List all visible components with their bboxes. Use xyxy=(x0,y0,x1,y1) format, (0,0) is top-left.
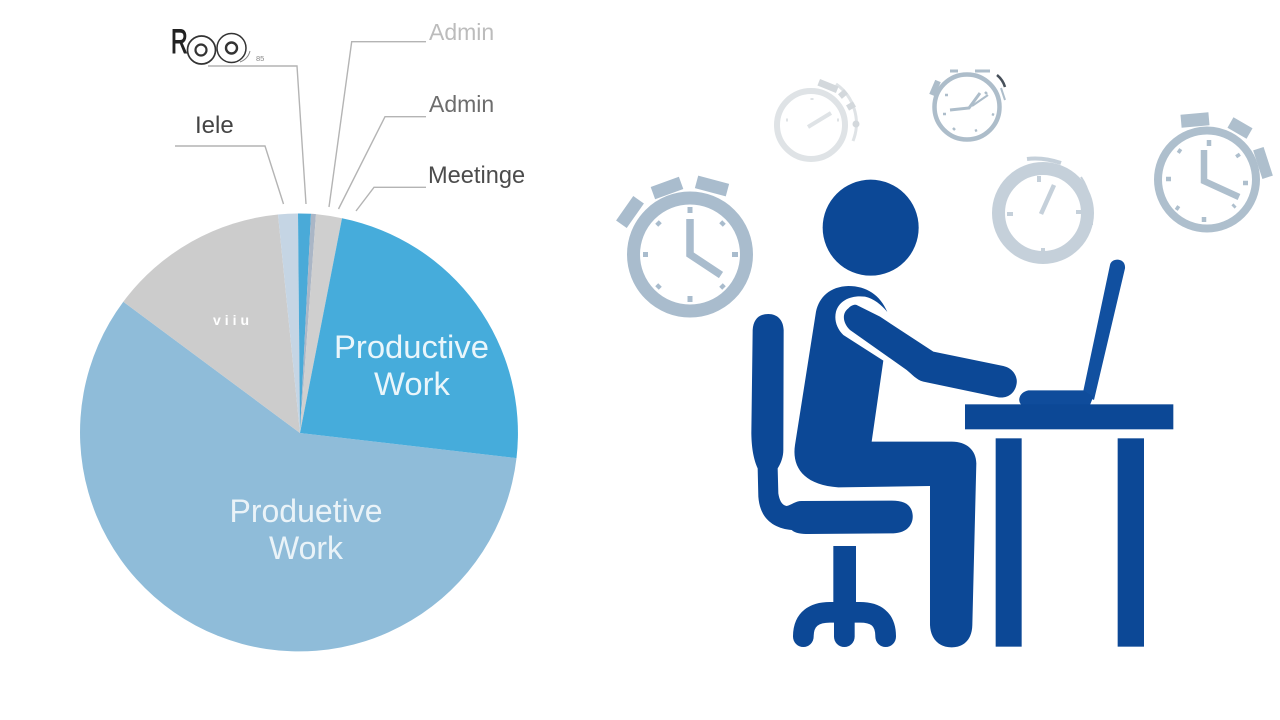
label: logo mark xyxy=(171,24,264,64)
chair base xyxy=(803,612,886,637)
logo rings xyxy=(188,34,250,64)
label: productive work lower: Produetive xyxy=(230,493,382,529)
person at desk xyxy=(751,180,1173,647)
desk left leg xyxy=(996,438,1022,647)
label: productive work lower: Work xyxy=(269,530,344,566)
laptop screen xyxy=(1083,260,1125,400)
laptop base xyxy=(1019,390,1093,405)
slice: thin slate xyxy=(300,214,316,433)
slice: small blue xyxy=(298,213,311,433)
logo letter: R xyxy=(171,24,188,61)
slice: admin grey xyxy=(300,214,342,433)
clock: faded top xyxy=(777,79,860,159)
label: admin: Admin xyxy=(429,91,494,117)
slice: idle grey xyxy=(123,214,300,433)
head xyxy=(823,180,919,276)
slice: large productive work xyxy=(80,302,516,651)
leader lines xyxy=(175,42,426,211)
logo small caption: 85 xyxy=(256,54,264,63)
label: idle: Iele xyxy=(195,112,234,139)
clock: far right xyxy=(1158,112,1273,228)
desk top xyxy=(965,404,1173,429)
label: admin faded: Admin xyxy=(429,19,494,45)
clock: small top xyxy=(932,71,1005,140)
pie chart xyxy=(80,213,518,651)
desk right leg xyxy=(1118,438,1144,647)
slice: productive work blue xyxy=(300,218,518,458)
clock: large left xyxy=(616,176,746,311)
label: small slice caption: viiu xyxy=(213,312,253,328)
label: productive work upper: Work xyxy=(374,365,451,402)
label: meetings: Meetinge xyxy=(428,163,525,189)
label: productive work upper: Productive xyxy=(334,328,489,365)
slice: pale blue xyxy=(278,214,300,433)
clock: pale right of head xyxy=(998,158,1092,258)
chair stem xyxy=(833,546,856,606)
chair back and seat xyxy=(751,314,913,534)
torso and legs xyxy=(794,286,976,647)
arm xyxy=(844,305,1017,398)
